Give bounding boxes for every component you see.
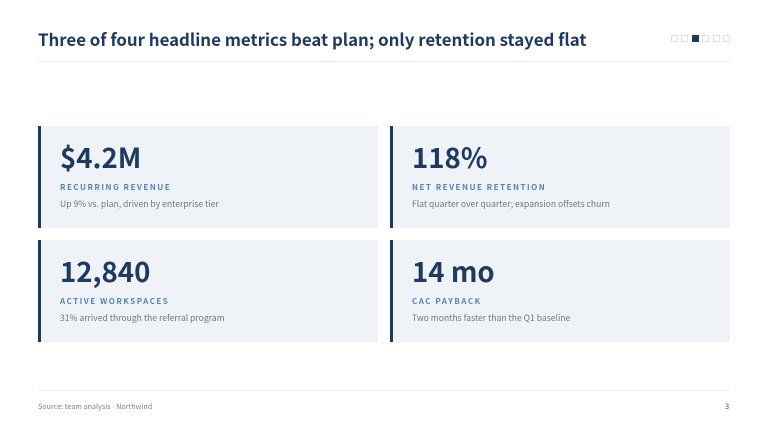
page number: 3 [725,400,729,412]
metric value: 14 mo [412,250,495,290]
metric label: ACTIVE WORKSPACES [60,296,169,306]
source note: Source: team analysis · Northwind [38,402,152,412]
title: Three of four headline metrics beat plan; only retention stayed flat [38,26,586,50]
panel: cac payback [390,240,730,342]
metric label: CAC PAYBACK [412,296,482,306]
metric note: Two months faster than the Q1 baseline [412,312,570,324]
metric value: $4.2M [60,136,141,176]
metric note: Flat quarter over quarter; expansion offsets churn [412,198,610,210]
metric value: 12,840 [60,250,150,290]
metric label: NET REVENUE RETENTION [412,182,546,192]
panel: recurring revenue [38,126,378,228]
metric label: RECURRING REVENUE [60,182,171,192]
progress indicator [671,35,730,42]
metric note: Up 9% vs. plan, driven by enterprise tier [60,198,219,210]
panel: active workspaces [38,240,378,342]
metric value: 118% [412,136,487,176]
panel: net revenue retention [390,126,730,228]
metric note: 31% arrived through the referral program [60,312,225,324]
